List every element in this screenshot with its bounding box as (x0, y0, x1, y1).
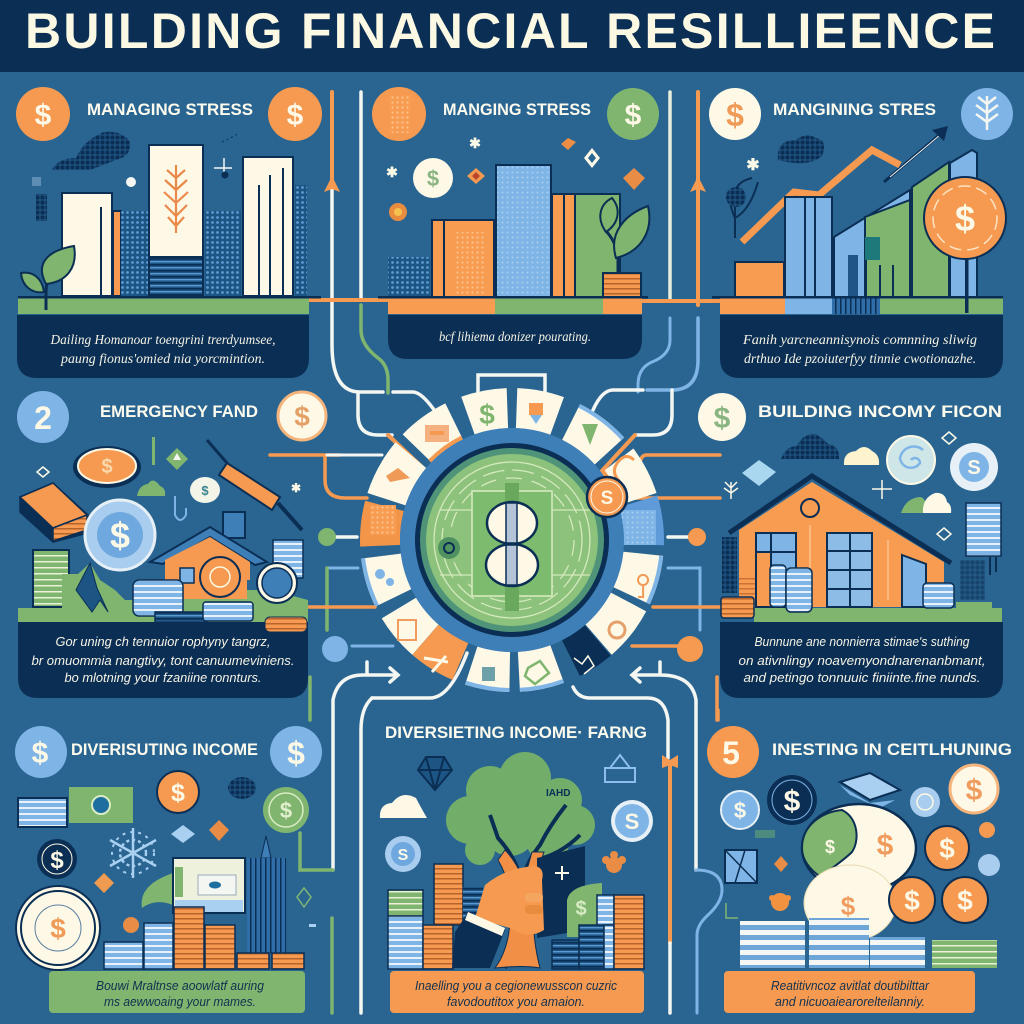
decorative marks (724, 432, 956, 540)
heading: EMERGENCY FAND (100, 403, 258, 421)
heading: DIVERISUTING INCOME (71, 741, 258, 759)
icon: blue coin right (611, 800, 653, 842)
icon: small blue stack (18, 798, 67, 827)
icon: small green seal (438, 537, 460, 559)
icon: coin stacks (721, 565, 954, 618)
icon: green coin: $ (625, 99, 642, 132)
icon: blue leaf coin (961, 88, 1013, 140)
heading: MANGINING STRES (773, 101, 936, 119)
icon: green note (567, 883, 602, 937)
icon: blue coin (385, 836, 421, 872)
ground strip (712, 296, 1003, 314)
icon: blue coin right: $ (287, 735, 305, 771)
icon: number coin 5 (707, 726, 759, 778)
caption text: favodoutitox you amaion. (447, 995, 585, 1009)
icon: striped tank (966, 503, 1001, 575)
caption text (96, 979, 264, 1009)
icon: orange tilted coin (73, 446, 141, 488)
icon: house (150, 512, 267, 599)
panel: building income (698, 393, 1003, 698)
icon: orange coin (157, 771, 199, 813)
icon: spiral coin (887, 436, 935, 484)
icon: snowflake (110, 828, 156, 878)
icon: big cream blob (802, 804, 916, 892)
caption text: br omuommia nangtivy, tont canuumeviniens. (32, 653, 294, 668)
icon: orange stack (265, 617, 307, 632)
icon: cream coin (278, 392, 326, 440)
icon: dark card with plus: IAHD (546, 788, 570, 799)
panel: managing stress 2 (372, 87, 659, 359)
icon: dark peak (76, 563, 108, 612)
icon: orange splat (602, 851, 626, 873)
coin labels (904, 833, 973, 916)
node: blue dot (322, 636, 348, 662)
heading: MANGING STRESS (443, 101, 591, 119)
icon: syringe (207, 440, 302, 530)
icon: green coin (607, 88, 659, 140)
dots (960, 560, 985, 600)
icon: blue coin: $ (734, 798, 746, 823)
segment accents (311, 339, 713, 741)
icon: cream coin: $ (427, 166, 439, 191)
icon: small blue coin lower (978, 854, 1000, 876)
dark ring (415, 443, 609, 637)
icon: diamond (418, 757, 452, 790)
chart: stripe stacks (740, 918, 997, 968)
caption panel (720, 315, 1003, 378)
icon: potted plant (600, 198, 649, 297)
small decorative marks (32, 134, 238, 221)
icon: green note: $ (575, 898, 587, 920)
node: orange dot (688, 528, 706, 546)
icon: dotted cloud (778, 135, 824, 163)
centre: segmented wheel (311, 339, 713, 741)
caption panel (49, 971, 305, 1013)
caption text (738, 634, 986, 685)
blue ring (400, 428, 624, 652)
icon: green coin (263, 787, 309, 833)
icon: sprout (21, 246, 75, 310)
chart: buildings (735, 150, 977, 297)
green ring (420, 448, 604, 632)
icon: blue box (725, 850, 757, 883)
icon: tree foliage (446, 752, 595, 865)
icon: magnifier coin (257, 563, 297, 603)
caption text: ms aewwoaing your mames. (104, 995, 256, 1009)
chart: building bars (62, 145, 307, 296)
icon: orange coin: $ (171, 779, 185, 807)
icon: cream cloud (844, 447, 879, 465)
node: orange dot lower (677, 636, 703, 662)
caption text (742, 333, 977, 367)
caption text: on ativnlingy noavemyondnarenanbmant, (738, 653, 986, 668)
caption text: and nicuoaiearorelteilanniy. (775, 995, 925, 1009)
icon: orange coin right: $ (287, 99, 304, 132)
caption text: Inaelling you a cegionewusscon cuzric (415, 979, 618, 993)
caption text: drthuo Ide pzoiuterfyy tinnie cwotionazhe. (744, 352, 976, 367)
node: green dot (318, 528, 336, 546)
caption text: paung fionus'omied nia yorcmintion. (60, 352, 265, 367)
icon: cream coin: $ (966, 774, 983, 807)
icon: blue coin: S (398, 847, 409, 864)
icon: figure-eight dollar (486, 502, 538, 586)
caption text (771, 979, 930, 1009)
icon: blue dollar coin (950, 443, 998, 491)
icon: blue dollar coin: S (967, 457, 981, 479)
caption text: Bunnune ane nonnierra stimae's suthing (754, 634, 970, 649)
icon: cream cloud (380, 795, 427, 818)
panel: managing stress 3 (709, 88, 1013, 378)
caption text: Gor uning ch tennuior rophyny tangrz, (56, 634, 270, 649)
panel: diversifying income (15, 726, 322, 1013)
green disc (426, 454, 598, 626)
arrow: trend up (884, 126, 948, 182)
caption text: and petingo tonnuuic finiinte.fine nunds. (744, 670, 980, 685)
caption text: Fanih yarcneannisynois comnning sliwig (742, 333, 977, 348)
icon: orange coin left (16, 87, 70, 141)
decorative icons (386, 135, 645, 221)
icon: orange fern (164, 165, 188, 233)
icon: dotted oval (228, 777, 256, 799)
icon: cream coin (698, 393, 746, 441)
caption panel (18, 622, 308, 698)
panel: investing (707, 726, 1012, 1013)
icon: money stack (20, 483, 88, 542)
panel: emergency fund (17, 391, 326, 698)
icon: orange tilted coin: $ (101, 456, 113, 478)
caption text (32, 634, 294, 685)
heading: BUILDING INCOMY FICON (758, 403, 1002, 421)
icon: sign coin (924, 177, 1006, 313)
chart: building bars (388, 165, 620, 297)
icon: dark coin: $ (784, 785, 801, 818)
caption panel (17, 315, 309, 378)
icon: dark coin (767, 775, 817, 825)
caption text: Reatitivncoz avitlat doutibilttar (771, 979, 930, 993)
icon: orange coin left: $ (35, 99, 52, 132)
icon: blue coin left: $ (32, 737, 49, 770)
icon: blue coin: $ (110, 515, 130, 556)
icon: blue coin left (15, 726, 67, 778)
decorative icons: ✱ (469, 135, 481, 151)
chart: right stacks (552, 895, 644, 969)
chart: stacked bars (104, 907, 304, 969)
decorative marks: $ (201, 483, 209, 498)
icon: cream coin: $ (726, 97, 744, 133)
icon: blue basket (605, 755, 635, 782)
icon: cream coin: $ (714, 402, 731, 435)
arrowhead: orange up right (690, 176, 706, 192)
icon: dark coin (37, 839, 77, 879)
decorative diamonds (94, 820, 316, 933)
icon: dark coin: $ (50, 847, 64, 874)
icon: lower cream coin: $ (841, 891, 856, 921)
icon: green stripe stack (33, 550, 69, 607)
icon: dark card with plus (537, 788, 585, 938)
panel: diversifying farm (380, 724, 653, 1013)
icon: cream coin (950, 765, 998, 813)
caption text: bo mlotning your fzaniine ronnturs. (64, 670, 262, 685)
heading: INESTING IN CEITLHUNING (772, 741, 1012, 759)
chart: left stacks (388, 864, 483, 969)
icon: small orange coin (587, 477, 627, 517)
icon: sign coin: $ (955, 198, 975, 239)
icon: lower cream coin (804, 865, 896, 941)
icon: green leaf (142, 873, 173, 908)
caption text (50, 333, 276, 367)
icon: big cream coin: $ (50, 913, 66, 944)
caption panel (720, 622, 1003, 698)
caption text: Bouwi Mraltnse aoowlatf auring (96, 979, 264, 993)
ground: jagged green (18, 563, 308, 622)
vertical band (505, 483, 519, 611)
icon: green bill (69, 787, 133, 823)
heading: DIVERSIETING INCOME· FARNG (385, 724, 647, 742)
ground strip (378, 296, 648, 314)
icon: number coin 2: 2 (34, 400, 52, 436)
title banner: BUILDING FINANCIAL RESILLIEENCE (25, 3, 995, 59)
coin labels: $ (957, 885, 973, 916)
segment icons: $ (479, 399, 495, 430)
icon: blue coin right: S (625, 809, 639, 834)
icon: cream coin (413, 158, 453, 198)
icon: right blue stack (273, 540, 303, 578)
caption text (415, 979, 618, 1009)
icon: orange coin right (268, 87, 322, 141)
caption panel (390, 971, 644, 1013)
caption text: Dailing Homanoar toengrini trerdyumsee, (50, 333, 276, 348)
icon: house (722, 476, 951, 607)
icon: blue coin (85, 500, 155, 570)
icon: coin stacks (133, 580, 253, 622)
icon: dotted cloud (781, 434, 839, 459)
arrowhead: orange bottom (662, 755, 678, 768)
heading: MANAGING STRESS (87, 101, 253, 119)
ground strip (18, 296, 321, 314)
icon: big cream blob: $ (825, 837, 835, 857)
chart line: orange trend (742, 150, 900, 242)
icon: big cream blob: $ (877, 829, 894, 862)
icon: cream coin: $ (294, 401, 310, 432)
icon: green coin: $ (280, 798, 292, 823)
icon: number coin 5: 5 (722, 735, 740, 771)
icon: small orange coin: S (601, 488, 613, 509)
decorative marks: ✱ (291, 481, 301, 495)
icon: orange coins (889, 822, 995, 923)
arrowhead: orange up left (324, 176, 340, 192)
icon: book (840, 773, 900, 808)
icon: cream coin (709, 88, 761, 140)
coin labels: $ (904, 885, 920, 916)
icon: hand and sleeve (452, 866, 544, 968)
decorative marks (37, 437, 301, 520)
maze pattern (434, 462, 590, 618)
connector lines (270, 92, 722, 1013)
icon: big cream coin (16, 886, 100, 970)
caption panel (724, 971, 975, 1013)
icon: skyscraper (247, 836, 286, 953)
panel: managing stress 1 (16, 87, 322, 378)
caption panel (388, 315, 642, 359)
icon: tree trunk (490, 805, 580, 968)
icon: small blue coin (910, 787, 940, 817)
icon: orange dotted coin (372, 87, 426, 141)
coin labels: $ (939, 833, 955, 864)
icon: number coin 2 (17, 391, 69, 443)
icon: sparkle and sketch: ✱ (746, 157, 760, 174)
wheel segments (325, 353, 699, 727)
icon: cloud with hill (901, 493, 951, 513)
icon: dotted cloud (52, 132, 130, 170)
icon: sparkle and sketch (726, 157, 760, 238)
icon: blue coin (721, 791, 759, 829)
caption text: bcf lihiema donizer pourating. (439, 330, 591, 345)
decorative icons: ✱ (386, 164, 398, 180)
icon: window card (173, 858, 245, 913)
segment icons (370, 399, 656, 684)
icon: blue coin right (270, 726, 322, 778)
ground strip (754, 602, 1002, 622)
decorative marks (726, 830, 791, 918)
